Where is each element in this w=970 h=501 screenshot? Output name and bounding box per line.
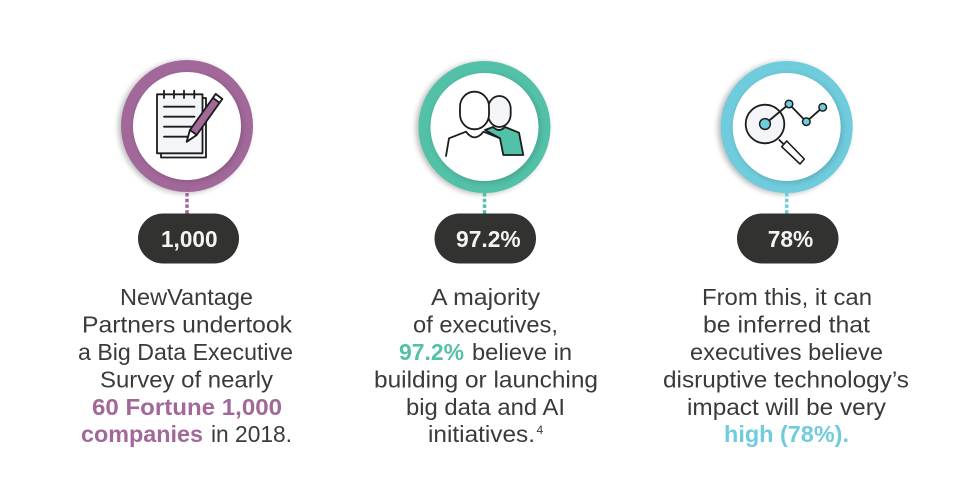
panel: executives column bbox=[374, 61, 598, 447]
text block: executives description: of executives, bbox=[413, 312, 558, 338]
text block: survey description: companies bbox=[81, 421, 203, 447]
panel: survey column bbox=[78, 60, 293, 447]
stat pill: 78%: 78% bbox=[768, 226, 813, 252]
text block: disruptive technology description bbox=[663, 284, 909, 447]
stat pill: 78% bbox=[737, 214, 838, 264]
text block: executives description: believe in bbox=[472, 339, 572, 365]
text block: disruptive technology description: be inferred that bbox=[703, 312, 870, 338]
text block: executives description: building or launching bbox=[374, 367, 598, 393]
icon: notepad and pencil bbox=[157, 91, 222, 158]
text block: disruptive technology description: From this, it can bbox=[702, 284, 872, 310]
text block: executives description: initiatives. bbox=[428, 421, 535, 447]
panel: disruptive technology column bbox=[663, 61, 909, 447]
icon ring: purple bbox=[118, 60, 253, 193]
stat pill: 1,000: 1,000 bbox=[161, 226, 218, 252]
text block: survey description: Survey of nearly bbox=[100, 367, 273, 393]
icon: two people bbox=[446, 92, 523, 156]
text block: executives description bbox=[374, 284, 598, 447]
text block: disruptive technology description: disruptive technology’s bbox=[663, 367, 909, 393]
text block: disruptive technology description: impact will be very bbox=[687, 394, 886, 420]
text block: executives description: big data and AI bbox=[406, 394, 565, 420]
stat pill: 97.2%: 97.2% bbox=[456, 226, 521, 252]
dotted connector bbox=[185, 193, 189, 214]
stat pill: 97.2% bbox=[434, 214, 536, 264]
icon ring: green bbox=[416, 61, 550, 194]
text block: executives description: A majority bbox=[431, 284, 540, 310]
text block: disruptive technology description: high (78%). bbox=[724, 421, 849, 447]
text block: survey description: Partners undertook bbox=[82, 312, 292, 338]
dotted connector bbox=[483, 193, 486, 214]
text block: disruptive technology description: executives believe bbox=[690, 339, 883, 365]
icon ring: blue bbox=[718, 61, 853, 194]
text block: survey description bbox=[78, 284, 293, 447]
stat pill: 1,000 bbox=[138, 214, 239, 264]
text block: executives description: 4 bbox=[536, 423, 544, 437]
dotted connector bbox=[785, 193, 788, 214]
text block: survey description: in 2018. bbox=[211, 421, 292, 447]
text block: survey description: NewVantage bbox=[120, 284, 253, 310]
icon: magnifier over line chart bbox=[746, 100, 826, 164]
text block: survey description: 60 Fortune 1,000 bbox=[92, 394, 282, 420]
text block: executives description: 97.2% bbox=[399, 339, 464, 365]
text block: survey description: a Big Data Executive bbox=[78, 339, 293, 365]
